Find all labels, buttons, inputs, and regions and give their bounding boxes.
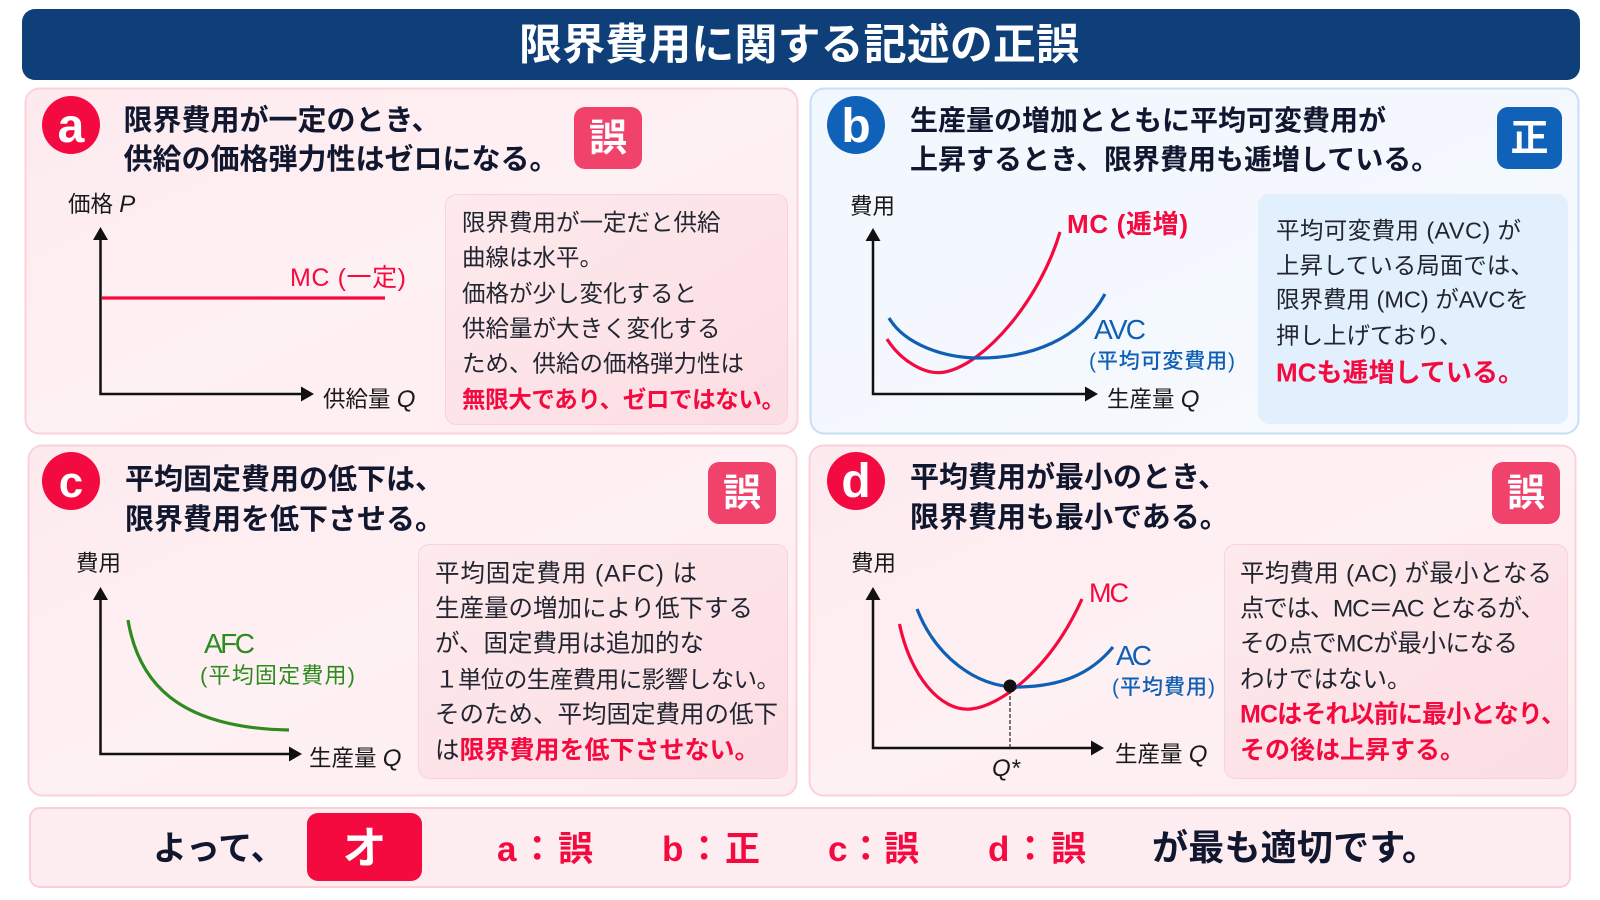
panel d (810, 446, 1576, 796)
explanation d: 平均費用 (AC) が最小となる (1240, 560, 1552, 588)
chart c: (平均固定費用) (200, 663, 355, 688)
answer badge: オ (342, 824, 386, 873)
heading a: 限界費用が一定のとき、 (124, 103, 440, 137)
heading a (124, 103, 559, 176)
label circle c (42, 452, 100, 510)
explanation c: 平均固定費用 (AFC) は (435, 560, 697, 588)
verdict badge c: 誤 (723, 473, 761, 515)
verdict badge d: 誤 (1507, 473, 1545, 515)
explanation c: １単位の生産費用に影響しない。 (435, 666, 780, 692)
label circle d (827, 452, 885, 510)
heading c (125, 463, 444, 536)
explanation d: わけではない。 (1240, 666, 1412, 694)
explanation d: 点では、MC＝AC となるが、 (1240, 594, 1545, 622)
heading c: 限界費用を低下させる。 (125, 503, 444, 536)
chart d: MC (1089, 578, 1129, 608)
explanation d: その点でMCが最小になる (1240, 630, 1518, 658)
explanation a: 無限大であり、ゼロではない。 (462, 386, 785, 412)
heading b (910, 104, 1439, 175)
chart d: AC (1116, 640, 1152, 671)
chart b: 費用 (850, 194, 895, 219)
explanation c: そのため、平均固定費用の低下 (435, 700, 778, 728)
heading a: 供給の価格弾力性はゼロになる。 (124, 143, 559, 176)
explanation c: 生産量の増加により低下する (435, 594, 753, 622)
explanation b: MCも逓増している。 (1276, 358, 1524, 388)
conclusion end: が最も適切です。 (1152, 827, 1438, 868)
chart c (76, 551, 401, 772)
answer badge (307, 813, 422, 881)
chart a: 供給量 Q (323, 386, 415, 413)
verdict badge d (1492, 462, 1560, 524)
explanation a (446, 194, 788, 424)
chart b: 生産量 Q (1107, 386, 1199, 413)
chart d: (平均費用) (1112, 676, 1215, 699)
chart d (851, 551, 1215, 782)
explanation b: 限界費用 (MC) がAVCを (1276, 286, 1529, 312)
verdict badge a (574, 107, 642, 169)
summary c: c：誤 (828, 830, 919, 869)
label circle b (827, 96, 885, 154)
heading b: 上昇するとき、限界費用も逓増している。 (910, 144, 1439, 175)
chart a: MC (一定) (290, 264, 406, 292)
chart a: 価格 P (68, 191, 135, 218)
explanation a: ため、供給の価格弾力性は (462, 350, 744, 376)
chart b: AVC (1094, 314, 1146, 345)
chart c: AFC (204, 628, 255, 659)
explanation a: 限界費用が一定だと供給 (462, 210, 721, 236)
panel c (28, 446, 796, 796)
explanation d: その後は上昇する。 (1240, 736, 1465, 764)
explanation d (1224, 544, 1568, 778)
chart a (68, 191, 415, 413)
panel a (26, 88, 798, 434)
panel b (810, 88, 1578, 434)
title bar (22, 9, 1580, 80)
explanation d: MCはそれ以前に最小となり、 (1240, 700, 1566, 728)
verdict badge b (1497, 107, 1562, 169)
label circle a: a (58, 100, 85, 153)
summary d: d：誤 (988, 830, 1086, 869)
label circle b: b (841, 100, 871, 153)
conclusion bar (30, 808, 1570, 887)
heading d: 平均費用が最小のとき、 (910, 460, 1227, 494)
heading d: 限界費用も最小である。 (910, 501, 1229, 534)
chart c: 費用 (76, 551, 121, 576)
label circle d: d (841, 455, 871, 508)
chart d: 費用 (851, 551, 896, 576)
title bar: 限界費用に関する記述の正誤 (519, 22, 1079, 70)
explanation b (1258, 194, 1568, 424)
explanation b: 押し上げており、 (1276, 322, 1462, 348)
verdict badge c (708, 462, 776, 524)
label circle c: c (59, 458, 83, 507)
explanation c: は限界費用を低下させない。 (435, 736, 760, 764)
summary a: a：誤 (497, 830, 593, 869)
verdict badge a: 誤 (589, 118, 627, 160)
summary b: b：正 (662, 830, 760, 869)
verdict badge b: 正 (1510, 118, 1549, 160)
explanation c: が、固定費用は追加的な (435, 630, 704, 658)
explanation b: 平均可変費用 (AVC) が (1276, 218, 1521, 244)
explanation c (418, 544, 788, 778)
explanation a: 供給量が大きく変化する (462, 316, 720, 342)
heading d (910, 460, 1229, 534)
explanation a: 価格が少し変化すると (462, 280, 697, 306)
chart d: Q* (992, 755, 1021, 782)
chart c: 生産量 Q (309, 745, 401, 772)
chart b (850, 194, 1235, 413)
chart b: (平均可変費用) (1089, 350, 1235, 373)
label circle a (42, 96, 100, 154)
heading b: 生産量の増加とともに平均可変費用が (910, 104, 1386, 136)
explanation a: 曲線は水平。 (462, 244, 603, 270)
conclusion lead: よって、 (153, 830, 285, 868)
explanation b: 上昇している局面では、 (1276, 252, 1534, 278)
heading c: 平均固定費用の低下は、 (125, 463, 444, 496)
chart b: MC (逓増) (1067, 209, 1188, 239)
chart d: 生産量 Q (1115, 741, 1207, 768)
